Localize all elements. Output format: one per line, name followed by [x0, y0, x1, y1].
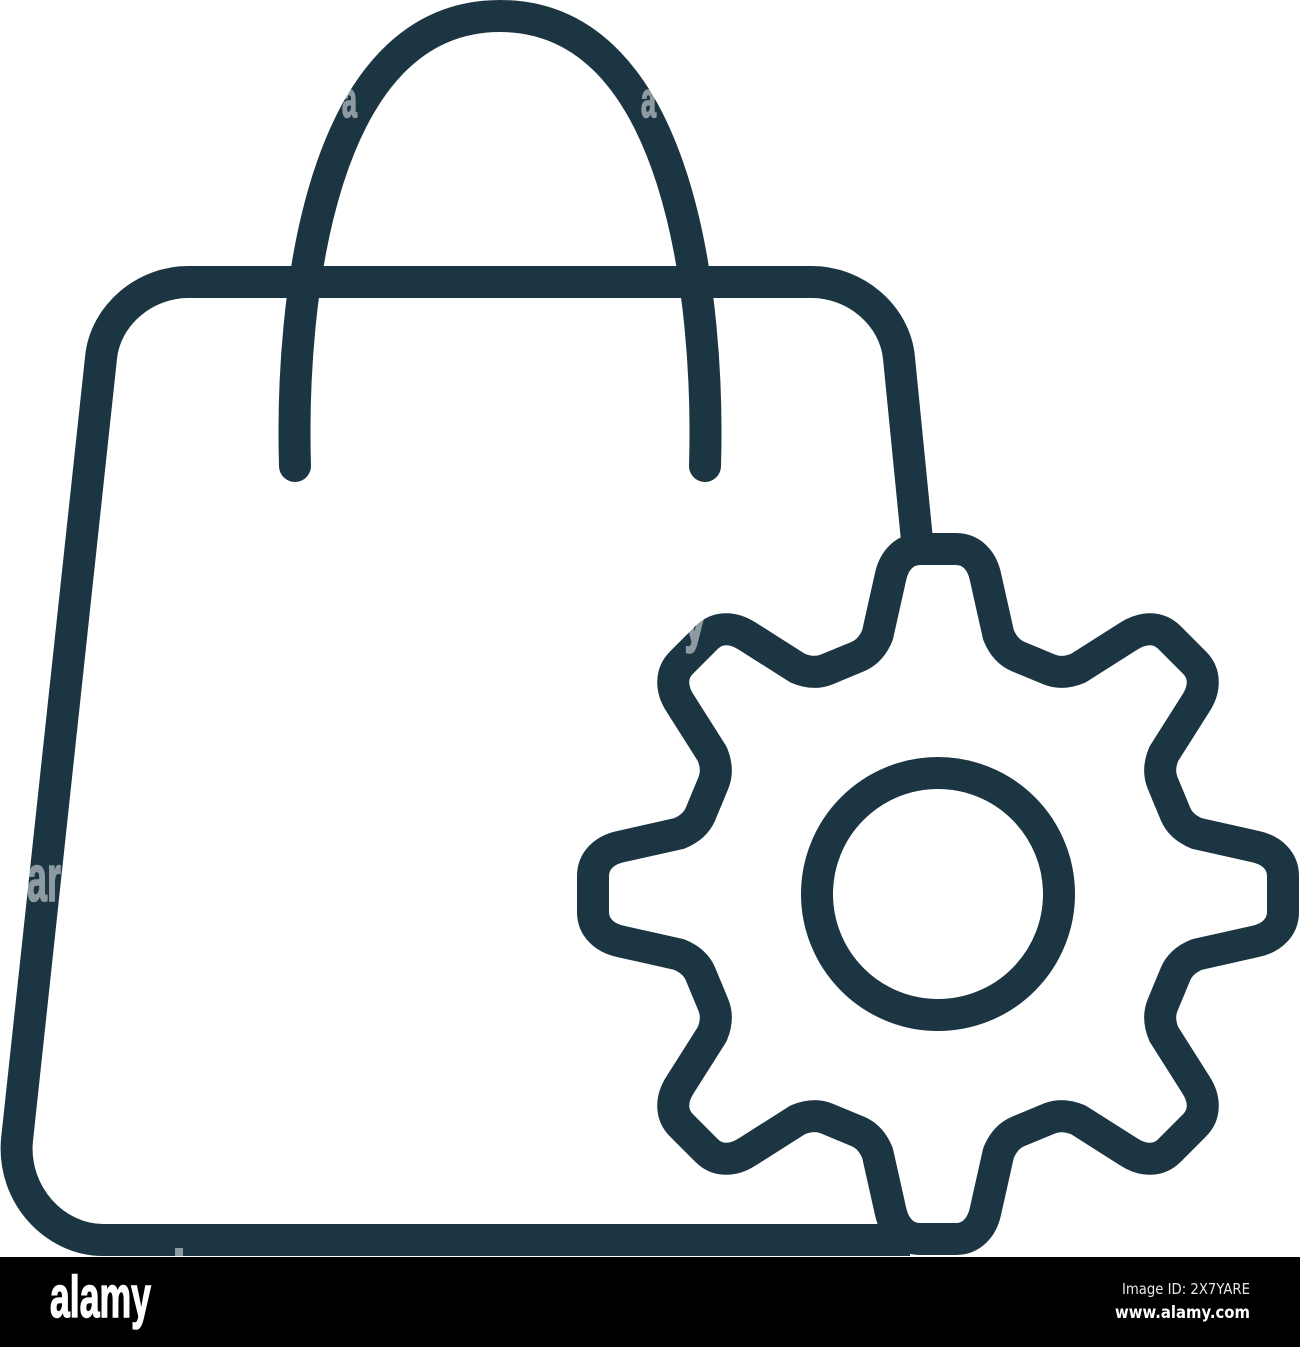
footer logo: alamy: alamy [50, 1265, 151, 1330]
icon: gear [593, 549, 1283, 1239]
footer bar [0, 1257, 1300, 1347]
footer text: image id: Image ID: 2X7YARE [1122, 1280, 1250, 1298]
watermark fragments on the icon strokes: y [685, 597, 704, 653]
watermark fragments on the icon strokes [27, 72, 704, 1257]
watermark fragments on the icon strokes: a [342, 72, 358, 128]
icon: shopping bag body [17, 282, 917, 1240]
watermark fragments on the icon strokes: ar [27, 841, 61, 915]
footer text: website: www.alamy.com [1115, 1303, 1250, 1323]
icon: bag handle [295, 16, 705, 466]
watermark fragments on the icon strokes: a [641, 72, 657, 128]
